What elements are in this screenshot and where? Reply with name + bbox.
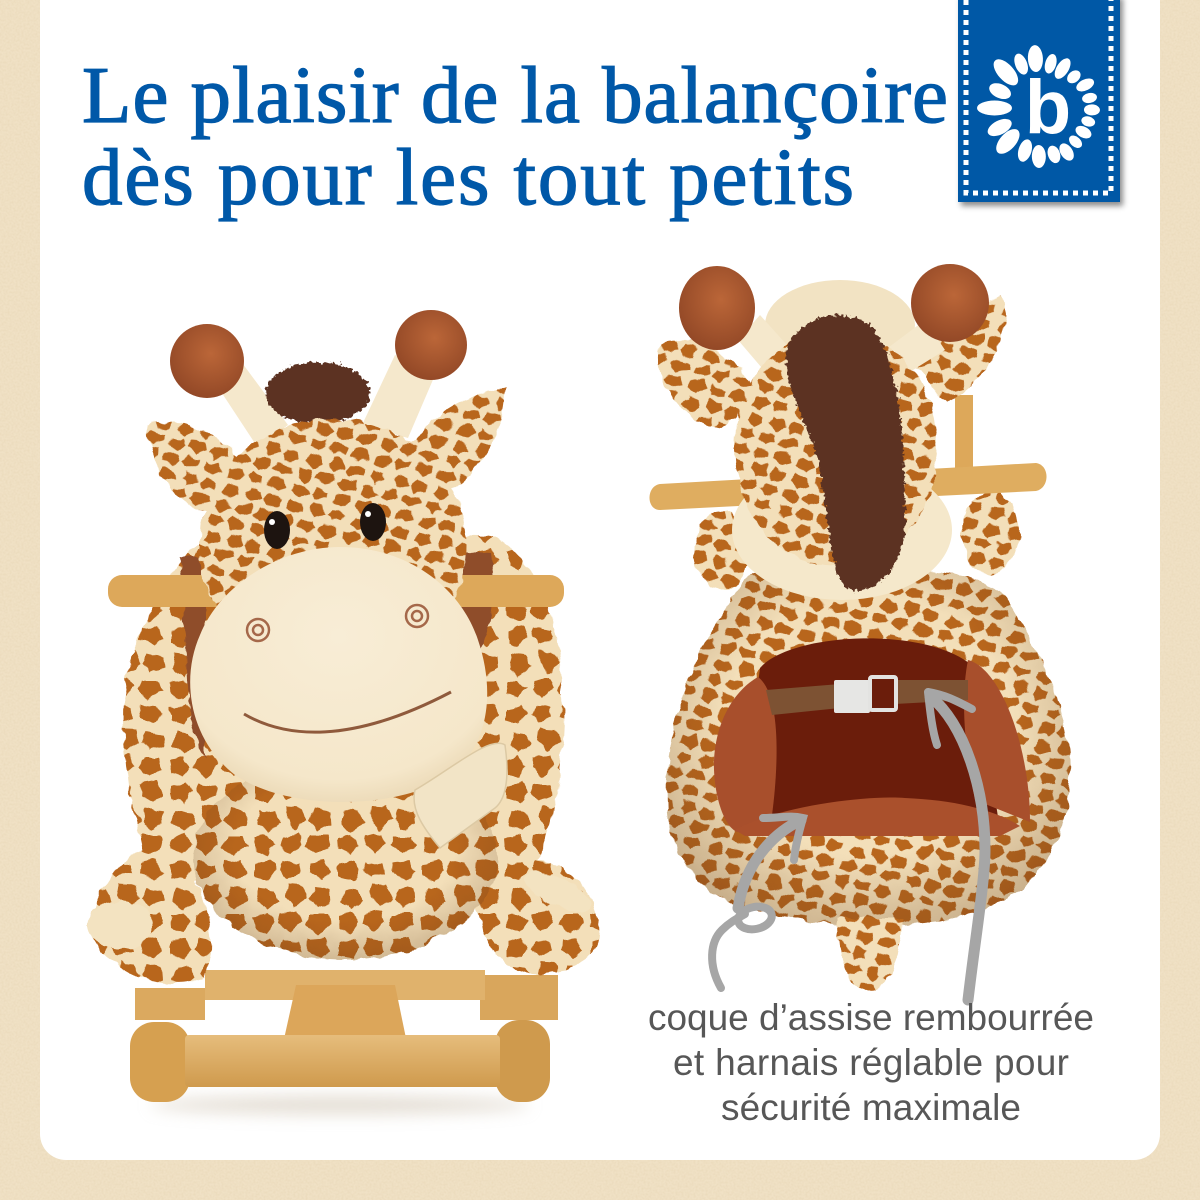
muzzle bbox=[190, 547, 487, 802]
rocker base bbox=[130, 970, 558, 1114]
logo badge: b bbox=[1025, 65, 1071, 150]
caption bbox=[648, 997, 1094, 1128]
caption: et harnais réglable pour bbox=[673, 1042, 1069, 1083]
arrow: harness bbox=[928, 692, 985, 1000]
legs bbox=[88, 756, 599, 984]
title: Le plaisir de la balançoire bbox=[82, 50, 948, 140]
ears bbox=[658, 295, 1018, 590]
title: dès pour les tout petits bbox=[82, 132, 854, 222]
handle bar bbox=[108, 575, 564, 607]
logo badge bbox=[958, 0, 1120, 202]
harness strap bbox=[766, 684, 840, 715]
horns bbox=[212, 360, 288, 448]
neck collar bbox=[732, 460, 952, 600]
right giraffe: back view bbox=[650, 264, 1070, 992]
buckle bbox=[834, 680, 870, 713]
title bbox=[82, 50, 948, 222]
caption: coque d’assise rembourrée bbox=[648, 997, 1094, 1038]
eyes bbox=[264, 511, 290, 549]
arrow: seat padding bbox=[712, 817, 803, 988]
back of muzzle bbox=[765, 280, 915, 370]
nostrils bbox=[247, 605, 428, 641]
smile bbox=[244, 692, 451, 732]
handle bar bbox=[650, 463, 1046, 510]
left giraffe: front view bbox=[88, 310, 599, 1114]
horns bbox=[738, 315, 805, 395]
ears and head bbox=[147, 388, 505, 671]
wooden post bbox=[955, 395, 973, 470]
hair tuft bbox=[266, 362, 370, 424]
seat shell bbox=[667, 564, 1070, 992]
head bbox=[734, 330, 938, 566]
tail bbox=[838, 918, 902, 992]
body bbox=[193, 756, 497, 960]
seat back bbox=[124, 535, 563, 880]
seat interior bbox=[714, 638, 1030, 836]
caption: sécurité maximale bbox=[721, 1087, 1021, 1128]
mane bbox=[786, 315, 905, 591]
scarf bbox=[414, 743, 507, 848]
